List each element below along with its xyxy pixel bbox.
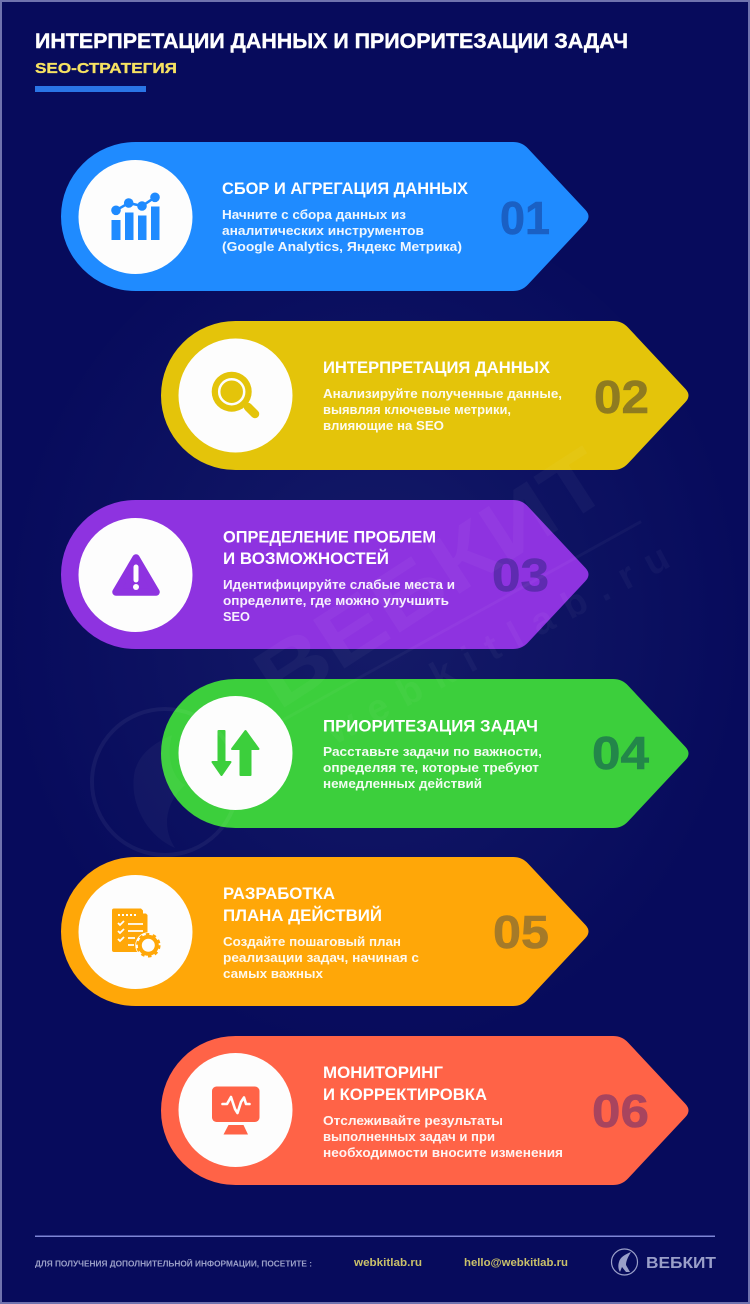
panel: step 4	[161, 679, 688, 828]
text: step 6: выполненных задач и при	[323, 1129, 495, 1144]
heading: step 2: ИНТЕРПРЕТАЦИЯ ДАННЫХ	[323, 358, 551, 377]
subtitle: SEO-СТРАТЕГИЯ	[35, 60, 177, 77]
text: step 1: (Google Analytics, Яндекс Метрика)	[222, 239, 462, 254]
watermark: ВЕБКИТ	[238, 429, 624, 726]
icon: monitor with pulse	[212, 1086, 260, 1134]
footer website: webkitlab.ru	[353, 1257, 422, 1269]
footer divider	[35, 1236, 715, 1237]
panel: step 1	[61, 142, 588, 291]
text: step 3: SEO	[223, 609, 250, 624]
text: step 2: влияющие на SEO	[323, 418, 444, 433]
icon: magnifier	[212, 372, 255, 414]
text: step 5: реализации задач, начиная с	[223, 950, 419, 965]
number 01: 01	[500, 192, 550, 244]
number 05: 05	[493, 906, 549, 958]
panel: step 3	[61, 500, 588, 649]
panel: step 5	[61, 857, 588, 1006]
footer logo: ВЕБКИТ	[646, 1255, 716, 1272]
heading: step 5: РАЗРАБОТКА	[223, 884, 335, 903]
text: step 4: определяя те, которые требуют	[323, 760, 539, 775]
text: step 2: Анализируйте полученные данные,	[323, 386, 562, 401]
number 04: 04	[592, 727, 649, 779]
title: ИНТЕРПРЕТАЦИИ ДАННЫХ И ПРИОРИТЕЗАЦИИ ЗАДАЧ	[35, 30, 628, 53]
text: step 4	[323, 744, 542, 791]
heading: step 4: ПРИОРИТЕЗАЦИЯ ЗАДАЧ	[323, 716, 538, 736]
text: step 6: Отслеживайте результаты	[323, 1113, 503, 1128]
text: step 3: определите, где можно улучшить	[223, 593, 449, 608]
icon: plan document with gear	[112, 907, 161, 958]
footer email: hello@webkitlab.ru	[464, 1257, 568, 1269]
text: step 3: Идентифицируйте слабые места и	[223, 577, 455, 592]
heading: step 3	[223, 528, 436, 568]
text: step 4: немедленных действий	[323, 776, 482, 791]
text: step 5: самых важных	[223, 966, 324, 981]
footer logo	[612, 1249, 716, 1275]
text: step 1: аналитических инструментов	[222, 223, 424, 238]
heading: step 6: МОНИТОРИНГ	[323, 1063, 443, 1082]
text: step 3	[223, 577, 455, 624]
number 03: 03	[492, 549, 549, 601]
heading: step 6: И КОРРЕКТИРОВКА	[323, 1085, 487, 1104]
watermark: webkitlab.ru	[319, 537, 677, 753]
watermark	[92, 429, 677, 855]
text: step 5: Создайте пошаговый план	[223, 934, 401, 949]
number 06: 06	[592, 1085, 649, 1137]
text: step 6: необходимости вносите изменения	[323, 1145, 563, 1160]
text: step 5	[223, 934, 419, 981]
title accent bar	[35, 86, 146, 92]
text: step 2: выявляя ключевые метрики,	[323, 402, 511, 417]
heading: step 3: И ВОЗМОЖНОСТЕЙ	[223, 549, 389, 568]
icon: bar chart	[111, 192, 160, 240]
heading: step 5: ПЛАНА ДЕЙСТВИЙ	[223, 906, 382, 925]
text: step 1: Начните с сбора данных из	[222, 207, 407, 222]
heading: step 6	[323, 1063, 487, 1104]
number 02: 02	[594, 371, 649, 423]
text: step 2	[323, 386, 562, 433]
panel: step 2	[161, 321, 688, 470]
heading: step 5	[223, 884, 382, 925]
text: step 1	[222, 207, 462, 254]
icon: sort arrows	[212, 731, 258, 775]
icon: warning	[116, 558, 156, 592]
heading: step 1: СБОР И АГРЕГАЦИЯ ДАННЫХ	[222, 179, 469, 198]
text: step 6	[323, 1113, 563, 1160]
panel: step 6	[161, 1036, 688, 1185]
heading: step 3: ОПРЕДЕЛЕНИЕ ПРОБЛЕМ	[223, 528, 436, 546]
footer note: ДЛЯ ПОЛУЧЕНИЯ ДОПОЛНИТЕЛЬНОЙ ИНФОРМАЦИИ, ПОСЕТИТЕ :	[35, 1260, 312, 1268]
text: step 4: Расставьте задачи по важности,	[323, 744, 542, 759]
